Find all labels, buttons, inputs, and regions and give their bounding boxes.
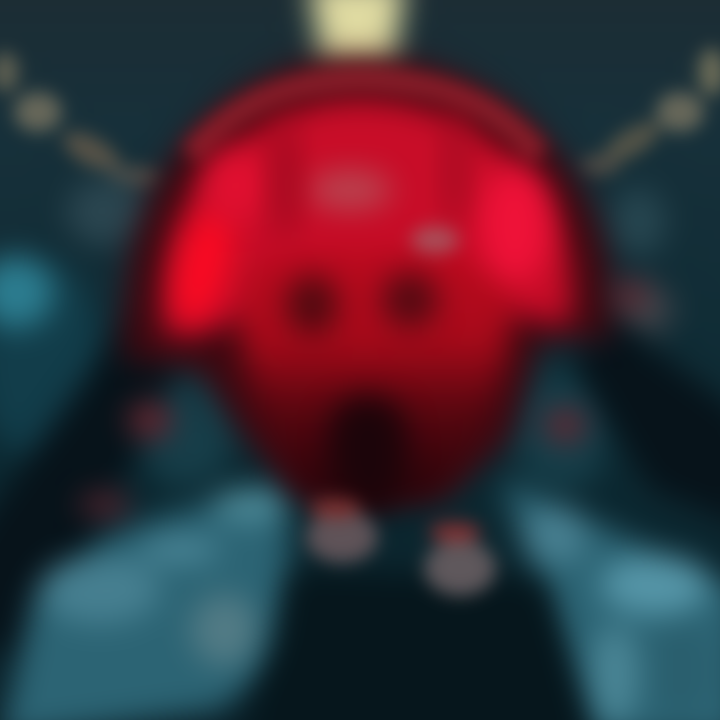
right hand	[424, 522, 496, 596]
left shoulder	[0, 480, 295, 720]
bright left highlight	[164, 201, 242, 329]
right chain	[580, 48, 720, 176]
forehead highlight	[411, 226, 459, 254]
right highlight	[479, 167, 551, 283]
left dome panel	[203, 149, 267, 221]
left hand	[306, 498, 378, 563]
helmet and face	[123, 55, 612, 515]
face	[238, 248, 512, 504]
light beam	[308, 0, 406, 72]
helmet rim	[190, 78, 540, 155]
right arm	[575, 310, 720, 530]
right shoulder	[500, 478, 720, 720]
right eye	[382, 272, 438, 328]
right background glow	[510, 370, 610, 490]
helmet dome	[163, 98, 572, 335]
haze beside helmet	[66, 178, 673, 336]
centre dome highlight	[308, 170, 392, 210]
dark chest	[245, 570, 590, 720]
red accents	[79, 281, 646, 517]
right dome groove	[443, 110, 467, 230]
dome groove	[271, 120, 299, 240]
left eye	[286, 275, 338, 335]
left teal glow	[0, 256, 102, 460]
mouth	[328, 395, 408, 515]
left chain	[0, 52, 161, 190]
left arm	[0, 310, 175, 660]
left background glow	[135, 375, 235, 485]
helmet outer shadow	[123, 55, 612, 500]
